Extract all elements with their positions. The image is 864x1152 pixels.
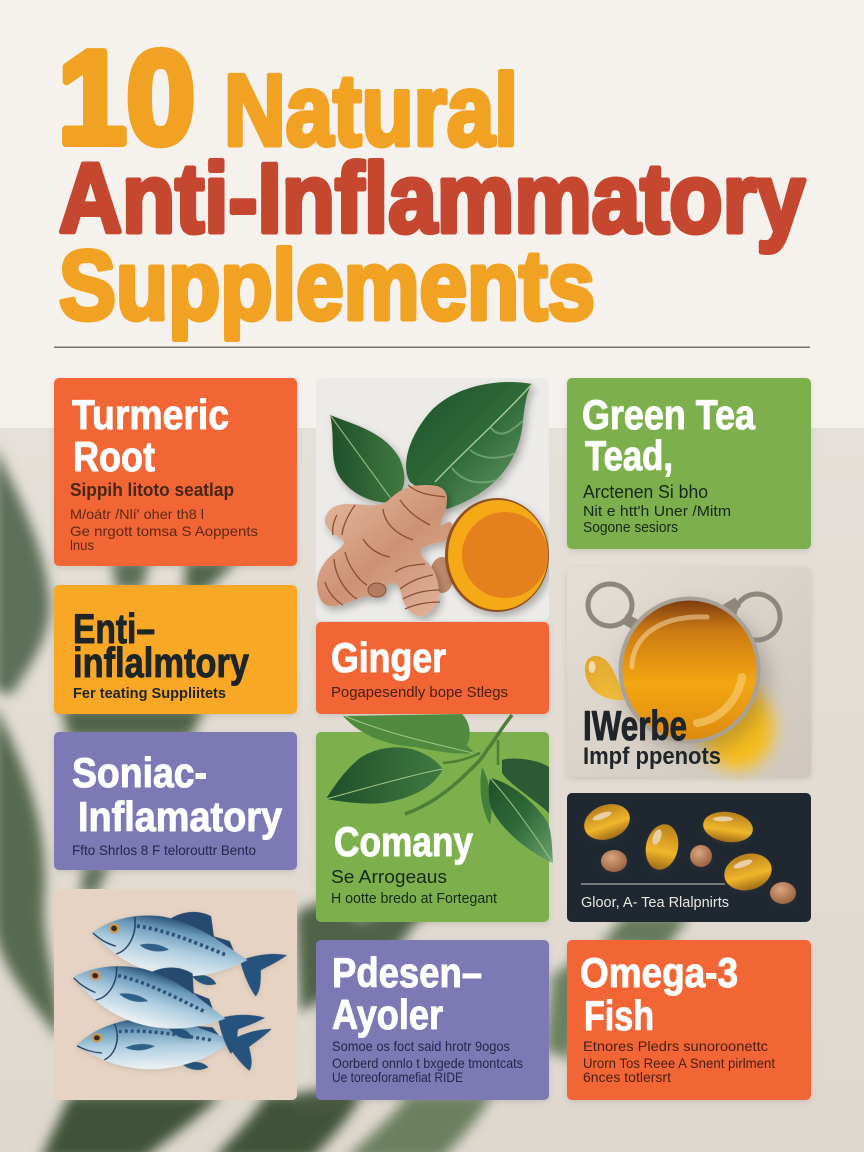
- panel: green tea: Sogone sesiors: [583, 520, 678, 536]
- panel: ginger: Ginger: [331, 634, 446, 681]
- icon: oil drop: [585, 656, 624, 700]
- background: blurred leaves: [0, 446, 690, 1152]
- title line: 10 Natural: Natural: [224, 55, 518, 167]
- icon: ginger nub: [431, 557, 452, 593]
- panel: pdesen-ayoler: [316, 940, 549, 1100]
- panel: turmeric root: Root: [73, 433, 155, 480]
- icon: green tea sprig: [326, 714, 553, 863]
- icon: right leaf: [406, 382, 532, 509]
- icon: bottom fish: [76, 1006, 272, 1074]
- panel: ginger: Pogapesendly bope Stlegs: [331, 684, 508, 701]
- panel: omega-3 fish: Fish: [584, 992, 654, 1039]
- panel: green tea: Green Tea: [582, 391, 756, 438]
- panel: anti-inflammatory: Enti–: [73, 605, 155, 652]
- title line: 10 Natural: [58, 24, 518, 171]
- panel: soniac-inflamatory: Soniac-: [72, 749, 207, 796]
- panel: pdesen-ayoler: Ayoler: [332, 991, 443, 1038]
- panel: comany: Se Arrogeaus: [331, 867, 447, 887]
- panel: soniac-inflamatory: [54, 732, 297, 870]
- panel: soniac-inflamatory: Ffto Shrlos 8 F telorouttr Bento: [72, 842, 256, 858]
- panel: capsules: Gloor, A- Tea Rlalpnirts: [581, 894, 729, 911]
- panel: pdesen-ayoler: Ue toreoforamefiat RIDE: [332, 1069, 463, 1085]
- panel: ginger: [316, 622, 549, 714]
- panel: omega-3 fish: Omega-3: [580, 949, 738, 996]
- panel: omega-3 fish: [567, 940, 811, 1100]
- panel: comany: H ootte bredo at Fortegant: [331, 890, 498, 907]
- icon: turmeric slice: [445, 498, 549, 612]
- subheading: Impf ppenots: [583, 743, 721, 770]
- panel: comany: Comany: [334, 818, 474, 865]
- icon: ginger root: [317, 485, 452, 616]
- panel: turmeric root: M/oátr /Nlí' oher th8 l: [70, 506, 204, 522]
- panel: green tea: Tead,: [585, 432, 673, 479]
- panel: turmeric root: lnus: [70, 537, 94, 553]
- icon: top fish: [87, 893, 292, 1001]
- panel: anti-inflammatory: [54, 585, 297, 714]
- title divider: [54, 346, 810, 348]
- panel: anti-inflammatory: Fer teating Suppliitets: [73, 685, 226, 702]
- panel: pdesen-ayoler: Somoe os foct said hrotr 9ogos: [332, 1038, 510, 1054]
- panel: soniac-inflamatory: Inflamatory: [78, 793, 283, 840]
- panel: turmeric root: Ge nrgott tomsa S Aoppents: [70, 523, 258, 539]
- panel: omega-3 fish: 6nces totlersrt: [583, 1069, 671, 1085]
- title line: 10 Natural: 10: [58, 24, 195, 171]
- panel: turmeric root: [54, 378, 297, 566]
- panel: turmeric root: Turmeric: [72, 391, 229, 438]
- panel: turmeric root: Sippih litoto seatlap: [70, 480, 234, 500]
- icon: yellow glow: [702, 686, 774, 770]
- panel: anti-inflammatory: inflalmtory: [73, 639, 250, 686]
- panel: oil pot illustration: [567, 567, 811, 777]
- title line: Supplements: Supplements: [59, 230, 595, 340]
- icon: middle fish: [66, 941, 272, 1060]
- panel: capsules: [567, 793, 811, 922]
- title: [58, 24, 805, 340]
- icon: capsules and seeds: [579, 798, 796, 904]
- panel: fish illustration: [54, 889, 297, 1100]
- icon: oil pot: [588, 584, 780, 752]
- panel: pdesen-ayoler: Pdesen–: [332, 949, 482, 996]
- panel: omega-3 fish: Etnores Pledrs sunoroonettc: [583, 1038, 768, 1054]
- panel: pdesen-ayoler: Oorberd onnlo t bxgede tmontcats: [332, 1055, 523, 1071]
- panel: green tea: Nit e htt'h Uner /Mitm: [583, 504, 731, 520]
- panel: omega-3 fish: Urorn Tos Reee A Snent pirlment: [583, 1055, 775, 1071]
- panel: green tea: Arctenen Si bho: [583, 482, 708, 502]
- panel: green tea: [567, 378, 811, 549]
- panel: comany: [316, 714, 553, 922]
- icon: left leaf: [330, 415, 404, 502]
- panel: ginger and turmeric illustration: [316, 378, 549, 621]
- heading: iwerbe: IWerbe: [583, 702, 687, 749]
